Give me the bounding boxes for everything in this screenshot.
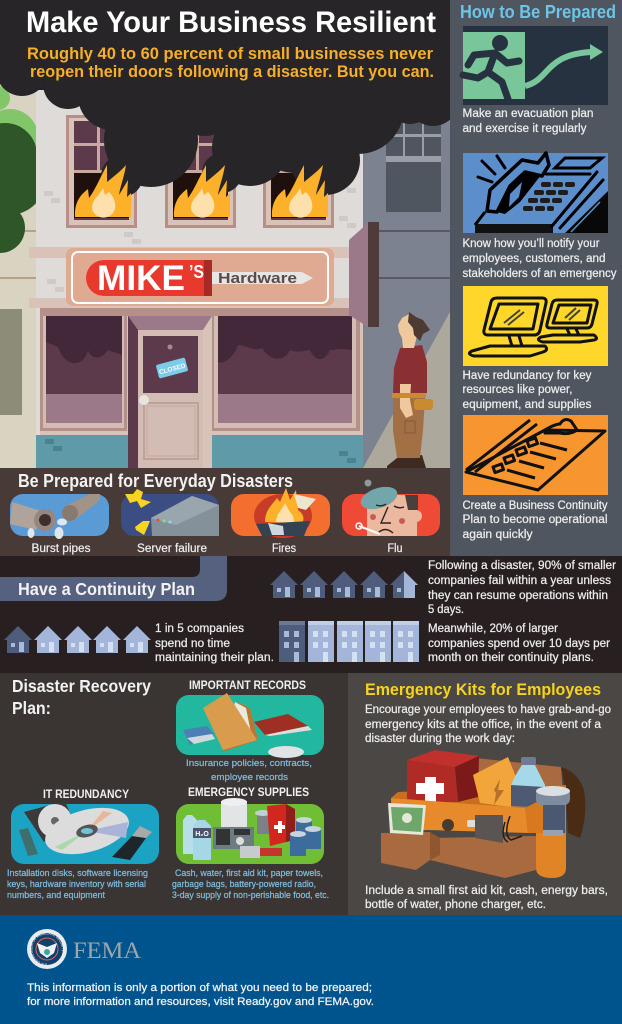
closed sign: CLOSED bbox=[158, 362, 187, 376]
FEMA seal: U.S. DEPARTMENT OF HOMELAND SECURITY bbox=[30, 932, 64, 966]
panel: disaster recovery plan bbox=[0, 673, 348, 915]
caption: records bbox=[186, 758, 312, 783]
text: redundancy: Have redundancy for key bbox=[462, 370, 592, 382]
heading bbox=[12, 676, 151, 718]
left shop window bbox=[40, 316, 127, 431]
text: redundancy: equipment, and supplies bbox=[462, 399, 592, 411]
text: notify: employees, customers, and bbox=[462, 253, 606, 265]
FEMA wordmark: FEMA bbox=[73, 938, 141, 963]
panel: everyday disasters bbox=[0, 468, 450, 556]
text: redundancy: resources like power, bbox=[462, 384, 572, 396]
icon: emergency kit bag bbox=[381, 750, 585, 878]
subheading: emergency supplies: EMERGENCY SUPPLIES bbox=[188, 785, 309, 799]
icon: records bbox=[176, 693, 324, 758]
heading: Disaster Recovery bbox=[12, 676, 151, 696]
wall bricks bbox=[44, 188, 356, 292]
text: 20 percent: month on their continuity plans. bbox=[428, 652, 594, 664]
panel: emergency kits bbox=[348, 673, 622, 915]
text: notify bbox=[462, 238, 617, 280]
caption: supplies bbox=[172, 868, 329, 901]
panel: continuity plan bbox=[0, 556, 616, 664]
text: intro bbox=[365, 704, 611, 745]
caption: records: employee records bbox=[211, 772, 288, 783]
text: include: bottle of water, phone charger, etc. bbox=[365, 899, 546, 911]
storefront bbox=[36, 308, 363, 468]
upper windows bbox=[66, 115, 334, 228]
label: Fires bbox=[272, 543, 296, 555]
text: 1 in 5: 1 in 5 companies bbox=[155, 623, 244, 635]
text: include: Include a small first aid kit, cash, energy bars, bbox=[365, 885, 608, 897]
text: continuity plan bbox=[462, 500, 608, 541]
subtitle: reopen their doors following a disaster. But you can. bbox=[30, 62, 434, 81]
text: redundancy bbox=[462, 370, 592, 411]
text: evacuation: Make an evacuation plan bbox=[462, 108, 594, 120]
text: 20 percent: companies spend over 10 days per bbox=[428, 638, 610, 650]
icon row: houses, 90 percent bbox=[270, 571, 418, 598]
icon: supplies: H₂O bbox=[195, 831, 209, 838]
footer text: for more information and resources, visit Ready.gov and FEMA.gov. bbox=[27, 996, 374, 1008]
icon: burst pipes bbox=[10, 494, 109, 539]
footer bbox=[0, 915, 622, 1024]
text: 90 percent: Following a disaster, 90% of smaller bbox=[428, 560, 616, 572]
icon: server failure bbox=[121, 489, 219, 536]
subtitle: Roughly 40 to 60 percent of small businesses never bbox=[27, 44, 433, 63]
right shop window bbox=[212, 316, 360, 431]
text: continuity plan: again quickly bbox=[462, 529, 533, 541]
heading: Be Prepared for Everyday Disasters bbox=[18, 471, 293, 491]
closed sign bbox=[156, 357, 188, 379]
text: evacuation bbox=[462, 108, 594, 135]
label: Server failure bbox=[137, 543, 207, 555]
door bbox=[128, 316, 212, 468]
text: 90 percent: they can resume operations within bbox=[428, 590, 608, 602]
panel: how to be prepared bbox=[450, 0, 622, 556]
right neighbouring building bbox=[363, 100, 450, 468]
text: 1 in 5 bbox=[155, 623, 274, 664]
text: intro: Encourage your employees to have grab-and-go bbox=[365, 704, 611, 716]
man looking up bbox=[387, 312, 433, 468]
caption: IT redundancy: keys, hardware inventory with serial bbox=[7, 879, 146, 890]
subheading: IT redundancy: IT REDUNDANCY bbox=[43, 787, 129, 801]
shop sign: Mike's Hardware: Hardware bbox=[218, 270, 297, 287]
caption: IT redundancy: Installation disks, software licensing bbox=[7, 868, 148, 879]
shop sign: Mike's Hardware bbox=[66, 248, 334, 306]
text: continuity plan: Plan to become operational bbox=[462, 514, 608, 526]
flames bbox=[75, 165, 328, 218]
icon: fires bbox=[231, 488, 330, 538]
caption: supplies: 3-day supply of non-perishable food, etc. bbox=[172, 890, 329, 901]
text: 90 percent: companies fail within a year unless bbox=[428, 575, 611, 587]
text: 20 percent bbox=[428, 623, 610, 664]
label: Flu bbox=[388, 543, 402, 555]
icon: redundant computers bbox=[463, 286, 608, 366]
icon: supplies bbox=[176, 798, 324, 864]
caption: records: Insurance policies, contracts, bbox=[186, 758, 312, 769]
teal base bbox=[36, 435, 363, 468]
text: notify: Know how you’ll notify your bbox=[462, 238, 600, 250]
text: continuity plan: Create a Business Continuity bbox=[462, 500, 608, 512]
caption: IT redundancy: numbers, and equipment bbox=[7, 890, 105, 901]
icon: flu bbox=[342, 480, 440, 536]
subtitle bbox=[27, 44, 434, 81]
heading band: Have a Continuity Plan bbox=[18, 579, 195, 599]
panel: storefront scene bbox=[0, 80, 450, 468]
text: notify: stakeholders of an emergency bbox=[462, 268, 617, 280]
icon row: houses, 1 in 5 bbox=[4, 626, 151, 653]
icon: disks and drives bbox=[11, 800, 159, 864]
text: 1 in 5: spend no time bbox=[155, 638, 230, 650]
caption: IT redundancy bbox=[7, 868, 148, 901]
text: evacuation: and exercise it regularly bbox=[462, 123, 587, 135]
tree bbox=[0, 86, 46, 253]
shop sign: Mike's Hardware: MIKE bbox=[97, 259, 185, 298]
caption: supplies: Cash, water, first aid kit, paper towels, bbox=[175, 868, 323, 879]
main building wall bbox=[36, 90, 363, 468]
text: include bbox=[365, 885, 608, 911]
heading: Plan: bbox=[12, 698, 51, 718]
text: intro: emergency kits at the office, in the event of a bbox=[365, 719, 602, 731]
text: 1 in 5: maintaining their plan. bbox=[155, 652, 274, 664]
footer text: This information is only a portion of what you need to be prepared; bbox=[27, 982, 372, 994]
label: Burst pipes bbox=[32, 543, 91, 555]
footer text bbox=[27, 982, 374, 1008]
hanging side sign bbox=[349, 222, 379, 327]
icon row: office buildings bbox=[279, 621, 419, 662]
shop sign: Mike's Hardware: ’S bbox=[189, 262, 204, 282]
left neighbouring building bbox=[0, 80, 36, 468]
caption: supplies: garbage bags, battery-powered radio, bbox=[172, 879, 316, 890]
heading: Emergency Kits for Employees bbox=[365, 680, 601, 699]
text: 90 percent bbox=[428, 560, 616, 616]
text: 20 percent: Meanwhile, 20% of larger bbox=[428, 623, 558, 635]
subheading: important records: IMPORTANT RECORDS bbox=[189, 678, 306, 692]
icon: clipboard checklist bbox=[463, 415, 608, 495]
text: 90 percent: 5 days. bbox=[428, 604, 464, 616]
smoke cloud bbox=[0, 0, 459, 197]
icon: telephone bbox=[463, 153, 608, 233]
icon: evacuation bbox=[463, 26, 608, 105]
sign bands bbox=[29, 247, 351, 308]
title: Make Your Business Resilient bbox=[26, 6, 436, 39]
text: intro: disaster during the work day: bbox=[365, 733, 515, 745]
heading band bbox=[0, 556, 227, 601]
